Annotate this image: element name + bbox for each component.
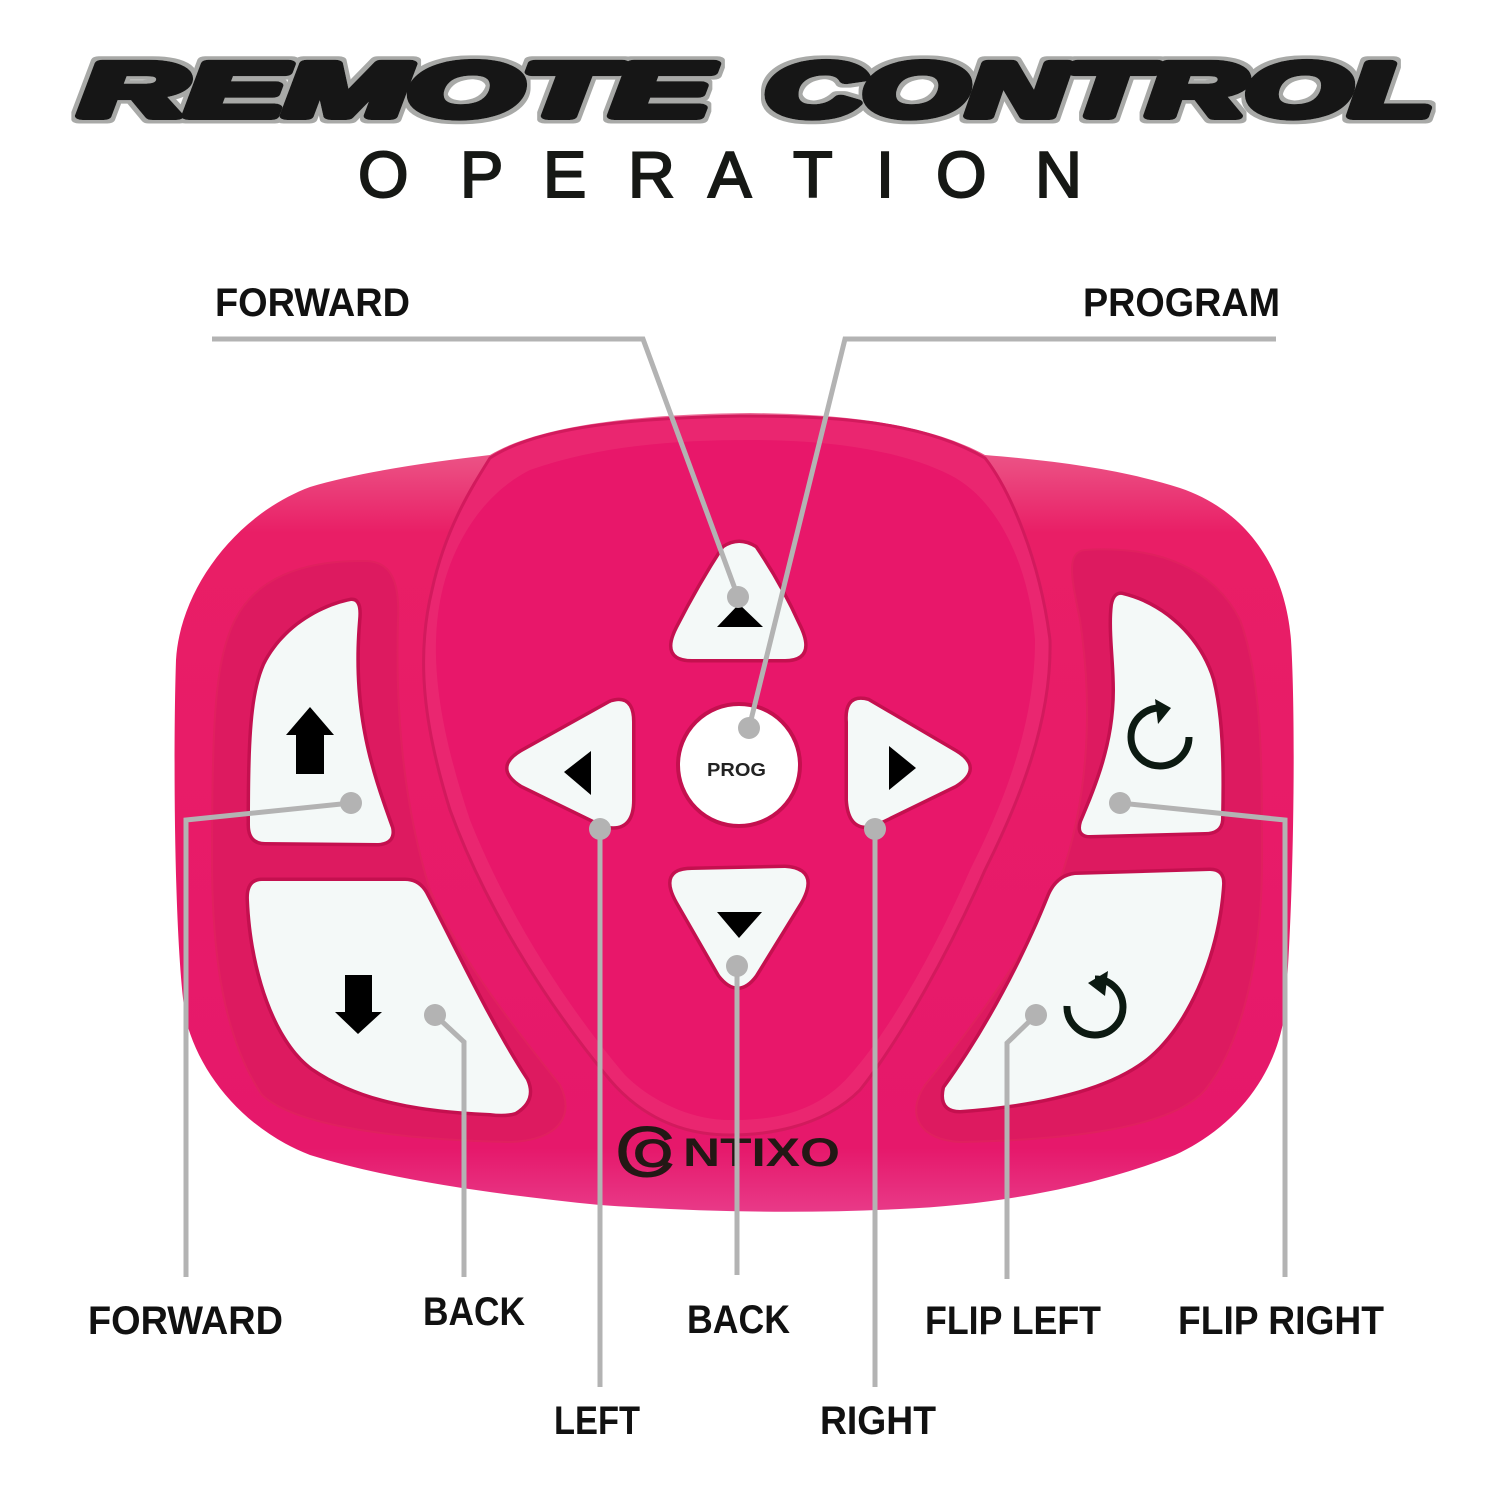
label: right: RIGHT (820, 1399, 936, 1443)
button: left forward (250, 601, 391, 843)
button: back triangle (672, 868, 806, 986)
label: back left: BACK (423, 1290, 525, 1334)
title: remote control: CONTROL (765, 48, 1433, 133)
logo: contixo: NTIXO (683, 1131, 840, 1175)
leader: bottom back (424, 1004, 464, 1277)
left button recess (212, 561, 566, 1142)
button: right triangle (848, 700, 968, 826)
logo: contixo: C (614, 1113, 676, 1193)
label: flip right: FLIP RIGHT (1178, 1299, 1384, 1343)
leader: top forward (212, 339, 749, 608)
logo: contixo: O (633, 1132, 673, 1176)
button: flip left (944, 871, 1222, 1110)
leader: left (589, 818, 611, 1387)
button: left back (249, 881, 529, 1114)
button: forward triangle (672, 543, 804, 659)
title: remote control: REMOTE (80, 48, 714, 133)
button: program (678, 704, 800, 826)
subtitle: operation: OPERATION (358, 138, 1082, 211)
leader: flip right (1109, 792, 1285, 1277)
label: back center: BACK (687, 1298, 790, 1342)
title: remote control (80, 48, 1433, 133)
label: forward top: FORWARD (215, 281, 410, 325)
remote control device (175, 413, 1294, 1212)
shield face (436, 440, 1035, 1120)
label: flip left: FLIP LEFT (925, 1299, 1101, 1343)
label: left: LEFT (554, 1399, 640, 1443)
logo: contixo (614, 1113, 840, 1193)
leader: bottom forward (186, 792, 362, 1277)
button: program: PROG (707, 760, 766, 780)
leader: flip left (1007, 1004, 1047, 1279)
button: flip right (1081, 595, 1221, 835)
leader: center back (726, 955, 748, 1275)
label: forward bottom: FORWARD (88, 1299, 283, 1343)
right button recess (916, 549, 1262, 1142)
leader: top program (738, 339, 1276, 739)
label: program: PROGRAM (1083, 281, 1280, 325)
shield rim (424, 416, 1050, 1135)
device body (175, 413, 1294, 1212)
button: left triangle (508, 701, 632, 826)
leader: right (864, 818, 886, 1387)
